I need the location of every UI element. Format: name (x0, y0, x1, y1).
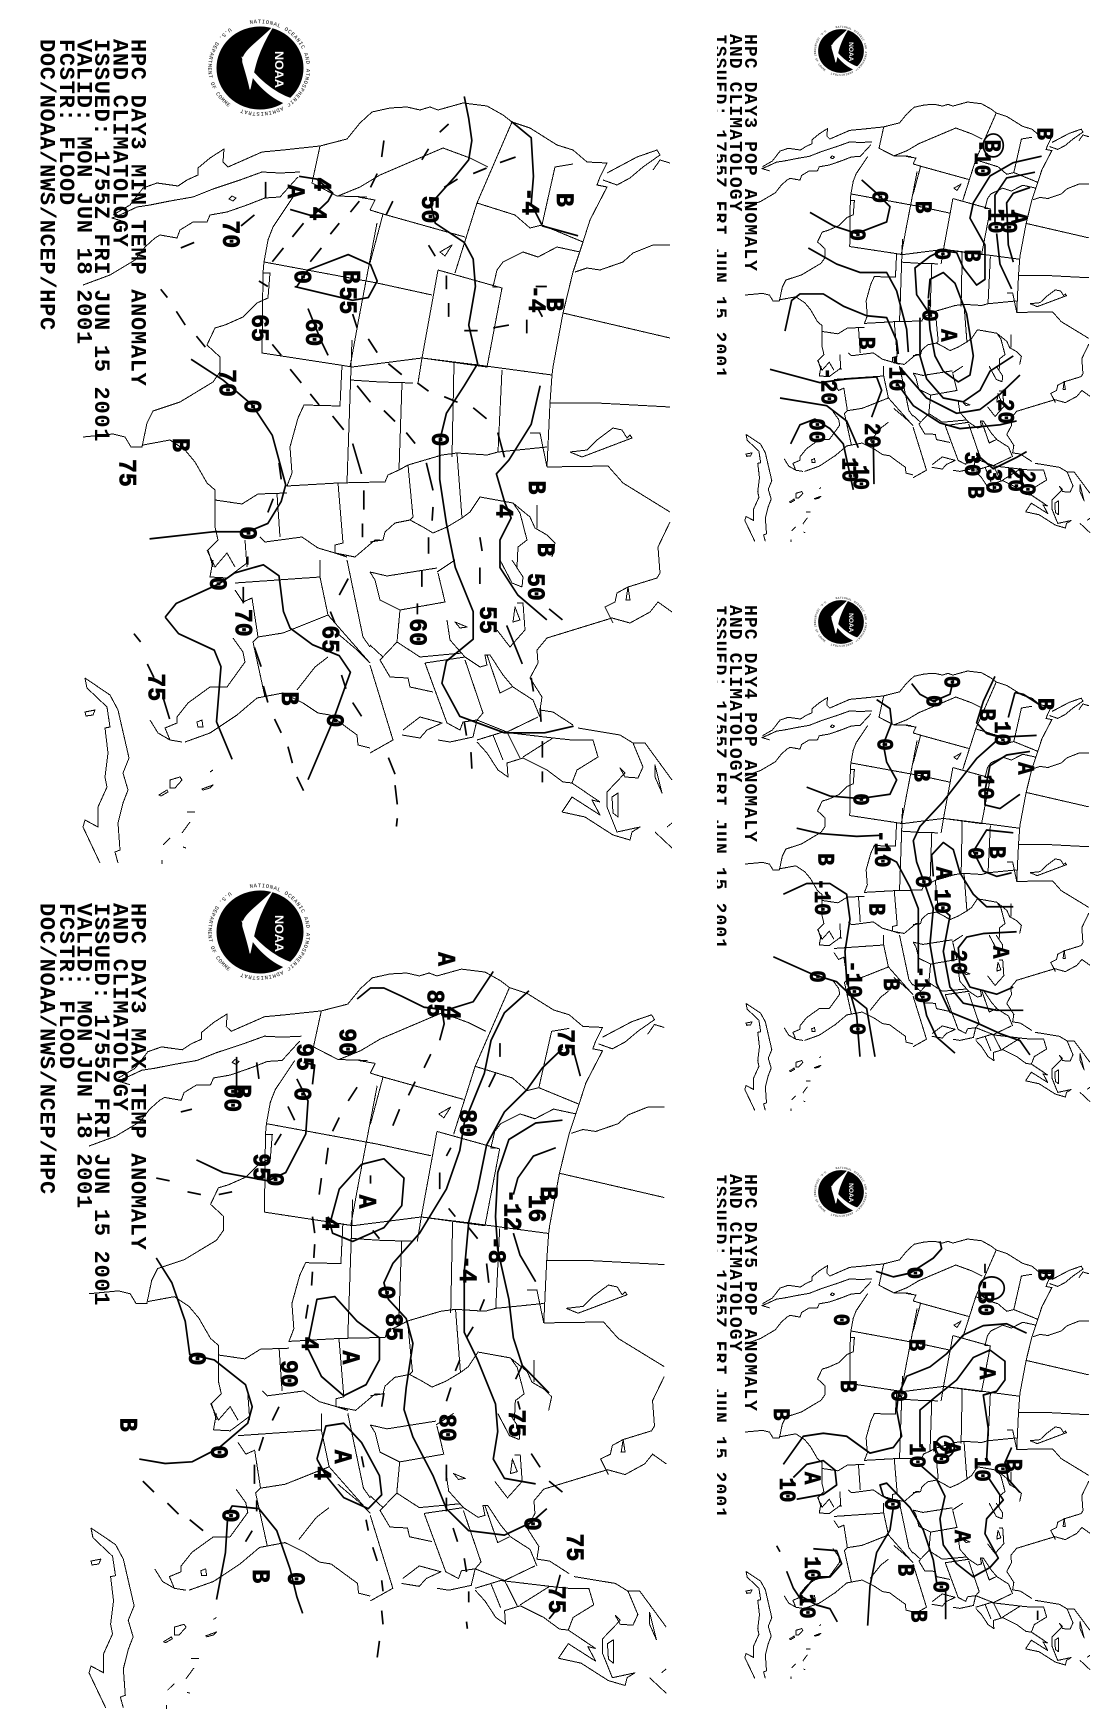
labels: day 4 pop values and pressure letters: -10 (908, 966, 934, 1003)
labels: day 5 pop values and pressure letters: 10 (903, 1443, 929, 1468)
heading: day 4 pop text block: AND CLIMATOLOGY (724, 605, 744, 784)
icon: NOAA logo: U.S. DEPARTMENT OF COMMERCE (814, 1171, 826, 1212)
labels: min temp values and pressure letters: B (165, 438, 193, 452)
labels: day 3 pop values and pressure letters: 10 (846, 465, 872, 490)
labels: day 3 pop values and pressure letters: 30 (979, 469, 1006, 494)
icon: NOAA logo (814, 1166, 867, 1217)
labels: min temp values and pressure letters: 4 (302, 207, 330, 221)
labels: min temp values and pressure letters: B (530, 543, 558, 557)
labels: max temp values and pressure letters (112, 952, 587, 1614)
labels: min temp values and pressure letters: A (280, 185, 308, 199)
labels: day 3 pop values and pressure letters: B (852, 337, 878, 349)
labels: day 5 pop values and pressure letters: 0 (827, 1314, 853, 1326)
labels: max temp values and pressure letters: 85 (419, 990, 447, 1017)
labels: max temp values and pressure letters: A (335, 1351, 363, 1365)
labels: day 4 pop values and pressure letters: A (986, 946, 1012, 959)
map: United States base map (89, 969, 666, 1709)
labels: min temp values and pressure letters: 4 (306, 177, 334, 191)
labels: day 3 pop values and pressure letters (802, 127, 1057, 498)
labels: day 4 pop values and pressure letters: A (929, 867, 956, 880)
labels: max temp values and pressure letters: 16 (521, 1195, 549, 1222)
icon: NOAA logo: NOAA (847, 42, 854, 62)
labels: day 4 pop values and pressure letters: 0 (843, 1023, 869, 1035)
heading: day 4 pop text block: ISSUED: 1755Z FRI JUN 15 2001 (708, 605, 728, 950)
labels: day 5 pop values and pressure letters: 10 (793, 1594, 819, 1619)
map: United States base map (745, 1239, 1090, 1679)
labels: day 3 pop values and pressure letters: 00 (802, 418, 828, 443)
labels: day 3 pop values and pressure letters: B (978, 140, 1004, 152)
labels: day 5 pop values and pressure letters: 0 (988, 1462, 1014, 1475)
labels: min temp values and pressure letters: 65 (314, 625, 342, 653)
labels: day 4 pop values and pressure letters: A (1011, 762, 1037, 775)
labels: min temp values and pressure letters: 0 (286, 270, 314, 284)
labels: day 5 pop values and pressure letters: B (904, 1610, 931, 1622)
heading: day 3 min temp text block: DOC/NOAA/NWS/NCEP/HPC (34, 39, 59, 331)
labels: min temp values and pressure letters: 0 (202, 577, 230, 591)
labels: day 5 pop values and pressure letters: 10 (798, 1556, 824, 1581)
labels: max temp values and pressure letters: 0 (181, 1352, 209, 1366)
labels: day 5 pop values and pressure letters: 0 (878, 1498, 904, 1511)
icon: NOAA logo (814, 596, 867, 647)
heading: day 4 pop text block: HPC DAY4 POP ANOMALY (739, 605, 759, 843)
labels: day 3 pop values and pressure letters: -10 (882, 354, 908, 391)
labels: max temp values and pressure letters: B (533, 1186, 561, 1200)
panel: day 4 probability of precipitation anomaly (717, 596, 1090, 1111)
labels: day 5 pop values and pressure letters (767, 1267, 1057, 1622)
labels: day 4 pop values and pressure letters: B (877, 978, 903, 991)
icon: NOAA logo: U.S. DEPARTMENT OF COMMERCE (814, 601, 826, 642)
labels: min temp values and pressure letters: 50 (520, 573, 548, 601)
labels: max temp values and pressure letters: B (245, 1569, 273, 1583)
labels: min temp values and pressure letters (111, 177, 577, 727)
labels: max temp values and pressure letters: -4 (451, 1255, 480, 1283)
labels: max temp values and pressure letters: 95 (289, 1043, 317, 1071)
labels: day 3 pop values and pressure letters: 20 (858, 423, 884, 448)
chart: day 3 pop contours (770, 134, 1042, 490)
labels: day 5 pop values and pressure letters: 0 (900, 1267, 926, 1279)
map: United States base map (83, 103, 672, 864)
labels: day 4 pop values and pressure letters: B (811, 853, 837, 866)
panel: day 3 minimum temperature anomaly (34, 20, 672, 864)
icon: NOAA logo (208, 20, 310, 116)
labels: day 4 pop values and pressure letters: 20 (944, 950, 971, 975)
labels: day 3 pop values and pressure letters: A (1004, 212, 1031, 225)
labels: day 4 pop values and pressure letters: B (907, 769, 933, 782)
heading: day 3 max temp text block: FCSTR: FLOOD (53, 903, 78, 1070)
labels: day 3 pop values and pressure letters: 20 (1013, 471, 1039, 496)
labels: min temp values and pressure letters: 70 (211, 369, 239, 397)
labels: day 3 pop values and pressure letters: -10 (968, 140, 994, 177)
icon: NOAA logo: NOAA (272, 51, 286, 88)
labels: day 3 pop values and pressure letters: - (916, 297, 942, 309)
labels: max temp values and pressure letters: A (430, 952, 458, 967)
chart: minimum temperature contours (134, 96, 578, 827)
labels: day 5 pop values and pressure letters: B (767, 1408, 793, 1421)
chart: maximum temperature contours (139, 971, 580, 1657)
labels: max temp values and pressure letters: 75 (550, 1029, 578, 1057)
labels: min temp values and pressure letters: 4 (488, 504, 516, 518)
map: United States base map (745, 102, 1090, 542)
labels: max temp values and pressure letters: 75 (559, 1533, 587, 1561)
heading: day 3 pop text block (717, 34, 757, 374)
labels: day 5 pop values and pressure letters: 10 (968, 1457, 994, 1482)
labels: max temp values and pressure letters: 90 (331, 1028, 359, 1056)
icon: NOAA logo: NATIONAL OCEANIC AND ATMOSPHERIC ADMINISTRATION (830, 596, 867, 647)
labels: day 4 pop values and pressure letters: -10 (839, 960, 866, 998)
labels: max temp values and pressure letters: 0 (259, 1173, 287, 1186)
labels: day 3 pop values and pressure letters: -20 (991, 387, 1017, 424)
labels: max temp values and pressure letters: 80 (431, 1414, 459, 1442)
labels: day 4 pop values and pressure letters: B (983, 846, 1009, 859)
labels: day 4 pop values and pressure letters: 0 (937, 676, 963, 688)
labels: day 5 pop values and pressure letters: 20 (926, 1440, 952, 1465)
labels: max temp values and pressure letters: 0 (516, 1517, 544, 1531)
heading: day 3 max temp text block: ISSUED: 1755Z FRI JUN 15 2001 (88, 903, 113, 1306)
heading: day 3 pop text block: HPC DAY3 POP ANOMALY (739, 34, 759, 272)
icon: NOAA logo: NATIONAL OCEANIC AND ATMOSPHERIC ADMINISTRATION (830, 1166, 867, 1217)
labels: max temp values and pressure letters: 0 (280, 1572, 308, 1586)
labels: day 5 pop values and pressure letters: -B0 (971, 1279, 997, 1316)
labels: min temp values and pressure letters: -4 (514, 187, 542, 215)
labels: min temp values and pressure letters: -4 (521, 285, 549, 313)
chart: day 5 pop contours (777, 1241, 1038, 1626)
icon: NOAA logo: U.S. DEPARTMENT OF COMMERCE (814, 30, 826, 72)
labels: day 5 pop values and pressure letters: B (1031, 1268, 1057, 1281)
labels: day 4 pop values and pressure letters (803, 676, 1057, 1035)
chart: day 4 pop contours (773, 676, 1040, 1057)
labels: max temp values and pressure letters: B (112, 1418, 140, 1432)
icon: NOAA logo: U.S. DEPARTMENT OF COMMERCE (208, 892, 232, 971)
labels: day 4 pop values and pressure letters: 0 (870, 738, 896, 751)
icon: NOAA logo: NOAA (847, 1183, 854, 1203)
labels: day 5 pop values and pressure letters: B (999, 1459, 1026, 1471)
labels: min temp values and pressure letters: 0 (236, 399, 264, 413)
labels: day 3 pop values and pressure letters: B (909, 201, 935, 213)
icon: NOAA logo: NATIONAL OCEANIC AND ATMOSPHERIC ADMINISTRATION (240, 884, 310, 980)
heading: day 5 pop text block: AND CLIMATOLOGY (724, 1174, 744, 1353)
labels: min temp values and pressure letters: 50 (414, 196, 442, 223)
labels: max temp values and pressure letters: 85 (378, 1313, 406, 1341)
labels: day 4 pop values and pressure letters: 0 (961, 847, 987, 860)
labels: day 3 pop values and pressure letters: 0 (928, 248, 954, 260)
labels: day 3 pop values and pressure letters: 20 (1001, 467, 1027, 492)
labels: min temp values and pressure letters: 55 (332, 287, 360, 314)
labels: day 3 pop values and pressure letters: 10 (981, 209, 1007, 234)
heading: day 3 min temp text block: ISSUED: 1755Z FRI JUN 15 2001 (88, 39, 113, 442)
heading: day 3 min temp text block: VALID: MON JUN 18 2001 (70, 39, 95, 345)
heading: day 3 pop text block: AND CLIMATOLOGY (724, 34, 744, 213)
labels: day 5 pop values and pressure letters: A (938, 1442, 964, 1455)
panel: day 3 probability of precipitation anomaly (717, 26, 1090, 542)
heading: day 3 max temp text block (34, 903, 150, 1306)
labels: min temp values and pressure letters: 70 (227, 609, 255, 637)
labels: day 4 pop values and pressure letters: 0 (919, 695, 946, 707)
heading: day 3 max temp text block: AND CLIMATOLOGY (106, 903, 131, 1112)
labels: day 5 pop values and pressure letters: A (798, 1472, 824, 1485)
labels: day 3 pop values and pressure letters: 0 (915, 309, 942, 322)
labels: day 4 pop values and pressure letters: -10 (868, 830, 894, 867)
labels: day 4 pop values and pressure letters: B (862, 903, 888, 916)
labels: max temp values and pressure letters: 75 (501, 1409, 529, 1437)
labels: max temp values and pressure letters: 4 (436, 1006, 464, 1020)
icon: NOAA logo: NOAA (272, 915, 286, 952)
labels: min temp values and pressure letters: B (521, 480, 549, 494)
labels: max temp values and pressure letters: A (326, 1450, 355, 1464)
labels: min temp values and pressure letters: B (335, 270, 363, 284)
labels: min temp values and pressure letters: 60 (401, 618, 430, 646)
labels: min temp values and pressure letters: 75 (140, 673, 168, 701)
labels: max temp values and pressure letters: -8 (481, 1236, 509, 1264)
labels: day 3 pop values and pressure letters: 10 (835, 457, 862, 482)
labels: day 3 pop values and pressure letters: 10 (994, 209, 1021, 234)
labels: day 3 pop values and pressure letters: B (1030, 127, 1057, 140)
labels: min temp values and pressure letters: B (539, 298, 567, 311)
labels: max temp values and pressure letters: 4 (314, 1217, 342, 1231)
labels: max temp values and pressure letters: -12 (496, 1189, 524, 1231)
labels: day 3 pop values and pressure letters: 30 (958, 452, 984, 477)
labels: day 5 pop values and pressure letters: B (902, 1339, 928, 1351)
labels: max temp values and pressure letters: 00 (216, 1084, 244, 1112)
labels: day 4 pop values and pressure letters: 10 (928, 889, 954, 914)
heading: day 3 min temp text block: FCSTR: FLOOD (53, 39, 78, 206)
labels: day 5 pop values and pressure letters: B (834, 1380, 860, 1392)
labels: day 5 pop values and pressure letters: B (891, 1564, 917, 1576)
labels: day 4 pop values and pressure letters: 0 (846, 793, 872, 806)
labels: max temp values and pressure letters: 4 (306, 1466, 334, 1480)
labels: max temp values and pressure letters: 0 (203, 1445, 231, 1459)
panel: day 3 maximum temperature anomaly (34, 884, 666, 1709)
icon: NOAA logo (208, 884, 310, 980)
labels: day 3 pop values and pressure letters: B (958, 250, 984, 262)
labels: min temp values and pressure letters: 70 (215, 220, 243, 248)
heading: day 4 pop text block (717, 605, 757, 946)
heading: day 3 min temp text block (34, 39, 150, 442)
heading: day 5 pop text block (717, 1174, 757, 1514)
icon: NOAA logo: U.S. DEPARTMENT OF COMMERCE (208, 28, 232, 107)
labels: day 4 pop values and pressure letters: 10 (971, 775, 997, 800)
labels: max temp values and pressure letters: 0 (286, 1087, 314, 1101)
labels: day 3 pop values and pressure letters: 0 (865, 191, 892, 203)
labels: day 3 pop values and pressure letters: A (934, 329, 961, 342)
labels: day 4 pop values and pressure letters: 0 (909, 875, 935, 888)
labels: day 3 pop values and pressure letters: -20 (814, 367, 841, 405)
heading: day 3 pop text block: ISSUED: 1755Z FRI JUN 15 2001 (708, 34, 728, 379)
labels: min temp values and pressure letters: B (274, 692, 302, 705)
heading: day 3 min temp text block: AND CLIMATOLOGY (106, 39, 131, 248)
labels: max temp values and pressure letters: B (226, 1084, 254, 1098)
labels: day 4 pop values and pressure letters: 0 (803, 970, 829, 983)
panel: day 5 probability of precipitation anomaly (717, 1166, 1090, 1679)
labels: day 4 pop values and pressure letters: B (973, 709, 999, 721)
icon: NOAA logo (814, 26, 867, 76)
labels: min temp values and pressure letters: 0 (232, 526, 260, 540)
labels: day 4 pop values and pressure letters: B (1031, 698, 1057, 710)
labels: day 5 pop values and pressure letters: A (948, 1530, 974, 1543)
heading: day 3 min temp text block: HPC DAY3 MIN TEMP ANOMALY (125, 39, 150, 387)
labels: max temp values and pressure letters: 0 (214, 1509, 242, 1523)
map: United States base map (745, 671, 1090, 1111)
labels: day 5 pop values and pressure letters: 0 (926, 1581, 952, 1593)
labels: min temp values and pressure letters: 60 (297, 318, 326, 346)
labels: max temp values and pressure letters: 90 (273, 1360, 301, 1388)
labels: day 5 pop values and pressure letters: 0 (884, 1389, 911, 1402)
labels: max temp values and pressure letters: 4 (294, 1337, 322, 1351)
labels: day 3 pop values and pressure letters: 0 (843, 228, 869, 241)
labels: max temp values and pressure letters: 95 (245, 1153, 273, 1181)
labels: min temp values and pressure letters: 0 (318, 714, 346, 727)
labels: max temp values and pressure letters: 80 (451, 1109, 480, 1137)
icon: NOAA logo: NOAA (847, 613, 854, 633)
labels: day 5 pop values and pressure letters: A (973, 1367, 999, 1380)
labels: day 4 pop values and pressure letters: 10 (988, 721, 1014, 746)
labels: min temp values and pressure letters: 55 (472, 606, 500, 634)
labels: min temp values and pressure letters: 0 (424, 433, 452, 446)
heading: day 3 max temp text block: DOC/NOAA/NWS/NCEP/HPC (34, 903, 59, 1195)
heading: day 3 max temp text block: VALID: MON JUN 18 2001 (70, 903, 95, 1209)
labels: min temp values and pressure letters: 65 (244, 314, 272, 342)
labels: day 3 pop values and pressure letters: B (961, 486, 987, 498)
labels: max temp values and pressure letters: A (351, 1195, 379, 1209)
heading: day 5 pop text block: ISSUED: 1755Z FRI JUN 15 2001 (708, 1174, 728, 1519)
heading: day 3 max temp text block: HPC DAY3 MAX TEMP ANOMALY (125, 903, 150, 1251)
labels: max temp values and pressure letters: 75 (541, 1586, 569, 1614)
icon: NOAA logo: NATIONAL OCEANIC AND ATMOSPHERIC ADMINISTRATION (830, 26, 867, 76)
labels: day 4 pop values and pressure letters: -10 (808, 878, 834, 916)
labels: day 5 pop values and pressure letters: 10 (773, 1478, 799, 1502)
heading: day 5 pop text block: HPC DAY5 POP ANOMALY (739, 1174, 759, 1412)
labels: min temp values and pressure letters: B (549, 193, 577, 207)
icon: NOAA logo: NATIONAL OCEANIC AND ATMOSPHERIC ADMINISTRATION (240, 20, 310, 116)
labels: min temp values and pressure letters: 75 (111, 459, 139, 487)
labels: max temp values and pressure letters: 0 (370, 1286, 398, 1299)
